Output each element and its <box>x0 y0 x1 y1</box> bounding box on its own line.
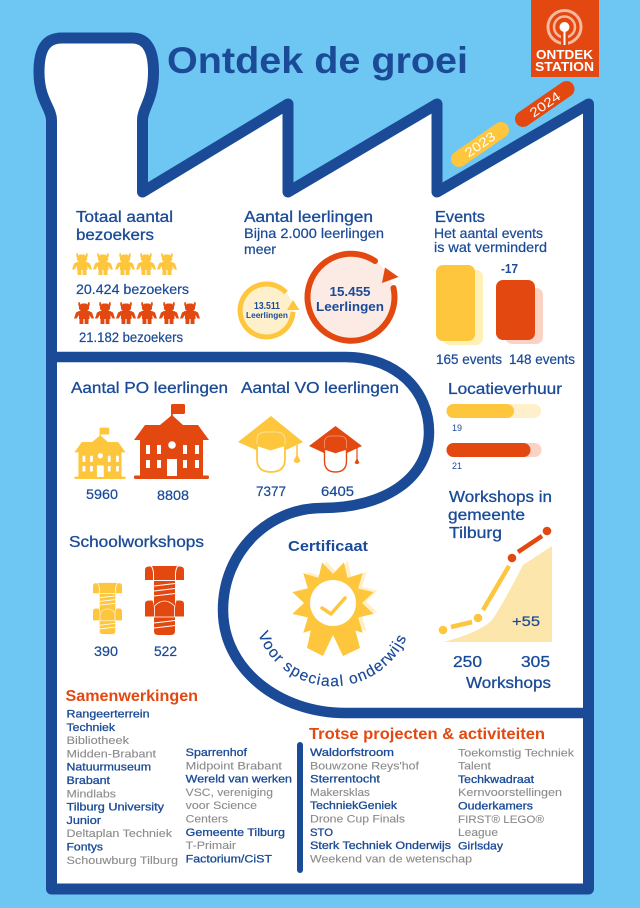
heading: trotse projecten: Trotse projecten & activiteiten <box>309 726 545 743</box>
chart: big circle 15.455: Leerlingen <box>316 299 384 314</box>
heading: workshops: gemeente <box>448 507 525 524</box>
list: samenwerkingen column 2: T-Primair <box>186 840 236 852</box>
legend: 2023 pill <box>459 129 501 160</box>
list: projecten column 1: Sterrentocht <box>310 774 380 786</box>
panel: schoolworkshops <box>69 534 204 659</box>
panel: locatieverhuur <box>446 381 562 471</box>
list: projecten column 2: League <box>458 827 498 839</box>
list: samenwerkingen column 2: Centers <box>186 814 229 826</box>
logo: Ontdek Station: ONTDEK <box>536 47 594 62</box>
chart: workshops growth: +55 <box>512 614 540 629</box>
heading: samenwerkingen: Samenwerkingen <box>66 688 198 705</box>
values: VO: 6405 <box>321 484 354 499</box>
bar: 148 events <box>496 280 543 344</box>
list: samenwerkingen column 2: Wereld van werken <box>186 774 292 786</box>
icon: small school <box>74 428 126 479</box>
list: projecten column 2 <box>458 747 575 852</box>
legend: 2023 pill: 2023 <box>462 129 498 160</box>
list: samenwerkingen column 1: Natuurmuseum <box>66 762 151 774</box>
values: PO: 8808 <box>157 488 189 503</box>
icon: certificate badge <box>292 561 378 656</box>
panel: VO leerlingen <box>238 380 399 499</box>
list: projecten column 2: FIRST® LEGO® <box>458 814 544 826</box>
bar: 165 events <box>436 265 483 345</box>
icon: big bolt <box>145 566 184 635</box>
logo: Ontdek Station: STATION <box>535 59 594 74</box>
bar: 21: 21 <box>452 461 462 471</box>
winding divider <box>51 357 589 713</box>
panel: trotse projecten en activiteiten <box>309 726 575 865</box>
heading: bezoekers: Totaal aantal <box>76 209 173 226</box>
list: samenwerkingen column 1: Techniek <box>66 722 116 734</box>
list: projecten column 2: Toekomstig Techniek <box>458 747 575 759</box>
heading: VO: Aantal VO leerlingen <box>241 380 399 397</box>
list: projecten column 1: Waldorfstroom <box>310 747 394 759</box>
subtitle: events: is wat verminderd <box>434 240 547 255</box>
subtitle: leerlingen: meer <box>244 242 276 257</box>
panel: samenwerkingen <box>66 688 292 867</box>
list: projecten column 1 <box>310 747 472 865</box>
list: projecten column 2: Talent <box>458 761 491 773</box>
list: samenwerkingen column 2: Gemeente Tilburg <box>186 827 285 839</box>
panel: aantal leerlingen <box>240 209 398 341</box>
values: schoolworkshops: 390 <box>94 644 118 659</box>
list: samenwerkingen column 2: Sparrenhof <box>186 747 248 759</box>
list: samenwerkingen column 1: Tilburg University <box>66 802 165 814</box>
list: projecten column 1: Makersklas <box>310 787 371 799</box>
panel: PO leerlingen <box>71 380 228 503</box>
heading: leerlingen: Aantal leerlingen <box>244 209 373 226</box>
list: projecten column 1: Drone Cup Finals <box>310 814 406 826</box>
labels: workshops values: 250 <box>453 654 482 671</box>
heading: locatieverhuur: Locatieverhuur <box>448 381 562 398</box>
panel: events <box>434 209 575 367</box>
list: projecten column 1: Sterk Techniek Onderwijs <box>310 840 452 852</box>
heading: certificaat: Certificaat <box>288 538 368 555</box>
list: samenwerkingen column 2: VSC, vereniging <box>186 787 273 799</box>
chart: small circle 13.511 <box>240 284 300 338</box>
text: 2023 visitors: 20.424 bezoekers <box>76 282 189 297</box>
icon: yellow graduation cap <box>238 416 303 472</box>
list: samenwerkingen column 2: voor Science <box>186 800 257 812</box>
labels: workshops values: Workshops <box>466 675 551 692</box>
list: samenwerkingen column 2: Factorium/CiST <box>186 853 272 865</box>
list: projecten column 1: STO <box>310 827 333 839</box>
list: samenwerkingen column 2 <box>186 747 292 865</box>
panel: totaal aantal bezoekers <box>72 209 200 345</box>
values: VO: 7377 <box>256 484 286 499</box>
labels: events values: 165 events <box>436 352 502 367</box>
panel: certificaat <box>260 538 406 686</box>
list: projecten column 2: Ouderkamers <box>458 800 534 812</box>
text: voor speciaal onderwijs: Voor speciaal onderwijs <box>260 630 406 686</box>
icons: 6 orange visitors <box>74 302 200 324</box>
vertical divider <box>297 742 303 873</box>
chart: big circle 15.455 <box>307 253 398 341</box>
list: projecten column 1: TechniekGeniek <box>310 800 398 812</box>
panel: workshops in gemeente Tilburg <box>439 489 552 692</box>
title: Ontdek de groei <box>167 40 468 81</box>
heading: PO: Aantal PO leerlingen <box>71 380 228 397</box>
labels: events values: 148 events <box>509 352 575 367</box>
icon: orange graduation cap <box>309 426 362 472</box>
list: projecten column 2: Girlsday <box>458 840 504 852</box>
list: samenwerkingen column 1: Brabant <box>66 775 110 787</box>
list: samenwerkingen column 1: Fontys <box>66 842 104 854</box>
icon: big school <box>134 404 209 479</box>
chart: big circle 15.455: 15.455 <box>330 285 371 299</box>
legend: 2024 pill: 2024 <box>527 89 563 120</box>
chart: workshops growth <box>439 527 552 642</box>
legend: 2024 pill <box>523 89 566 120</box>
heading: bezoekers: bezoekers <box>76 227 154 244</box>
list: samenwerkingen column 1: Bibliotheek <box>66 735 130 747</box>
subtitle: leerlingen: Bijna 2.000 leerlingen <box>244 226 384 241</box>
bar: 19: 19 <box>452 423 462 433</box>
heading: workshops: Tilburg <box>449 525 502 542</box>
values: PO: 5960 <box>86 487 118 502</box>
chart: small circle 13.511: 13.511 <box>254 300 280 312</box>
list: samenwerkingen column 1: Schouwburg Tilburg <box>66 855 178 867</box>
list: samenwerkingen column 1: Midden-Brabant <box>66 748 156 760</box>
values: schoolworkshops: 522 <box>154 644 177 659</box>
list: samenwerkingen column 1: Mindlabs <box>66 788 117 800</box>
list: samenwerkingen column 1: Rangeerterrein <box>66 708 150 720</box>
list: samenwerkingen column 2: Midpoint Brabant <box>186 760 282 772</box>
icon: small bolt <box>93 583 122 634</box>
list: projecten column 2: Kernvoorstellingen <box>458 787 562 799</box>
list: projecten column 2: Techkwadraat <box>458 774 534 786</box>
subtitle: events: Het aantal events <box>434 226 543 241</box>
heading: schoolworkshops: Schoolworkshops <box>69 534 204 551</box>
icons: 5 yellow visitors <box>72 253 177 275</box>
list: samenwerkingen column 1: Deltaplan Techniek <box>66 828 173 840</box>
list: samenwerkingen column 1: Junior <box>66 815 101 827</box>
heading: workshops: Workshops in <box>449 489 552 506</box>
logo: Ontdek Station <box>531 0 599 77</box>
text: 2024 visitors: 21.182 bezoekers <box>79 330 183 345</box>
list: samenwerkingen column 1 <box>66 708 178 867</box>
heading: events: Events <box>435 209 485 226</box>
list: projecten column 1: Weekend van de wetenschap <box>310 853 472 865</box>
list: projecten column 1: Bouwzone Reys'hof <box>310 760 420 772</box>
label: difference: -17 <box>501 261 518 276</box>
chart: small circle 13.511: Leerlingen <box>246 311 288 320</box>
labels: workshops values: 305 <box>521 654 550 671</box>
